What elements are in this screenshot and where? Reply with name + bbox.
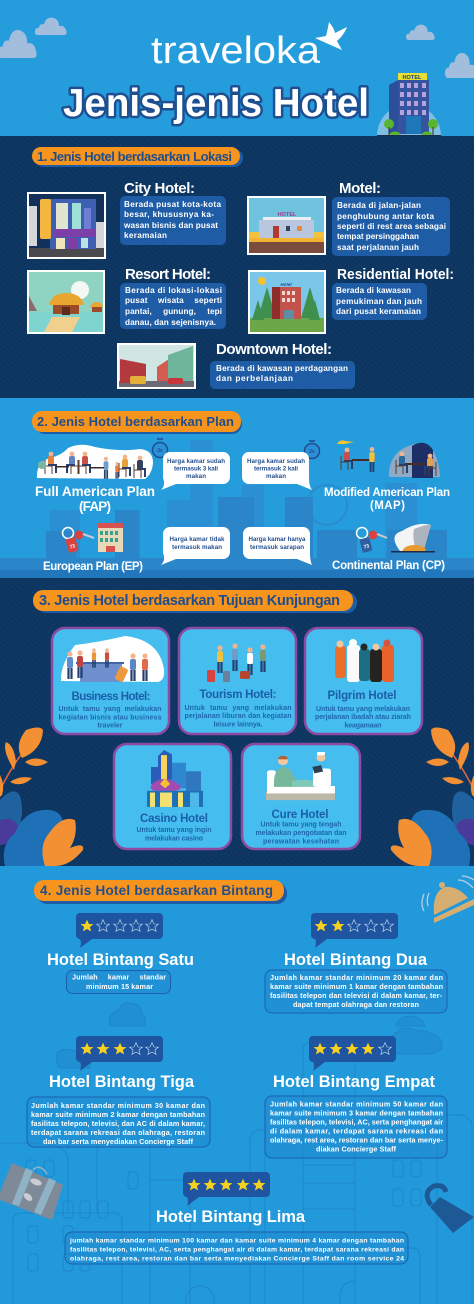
rating: one star [76,913,163,948]
card: business hotel [52,628,169,734]
card: cure hotel: Cure Hotel [272,809,328,821]
card: cure hotel: Untuk tamu yang tengah [260,822,342,828]
callout: 3 kali makan: Harga kamar sudah [167,458,225,465]
heading: section 4: 4. Jenis Hotel berdasarkan Bintang [40,883,273,898]
icon: clock 3x [152,438,168,458]
heading: section 3 [33,590,357,613]
callout: 3 kali makan [161,452,230,490]
icon: hotel building: HOTEL [403,75,422,81]
label: resort hotel: Resort Hotel: [125,266,211,283]
image: motel: HOTEL [278,212,297,218]
text: motel: Berada di jalan-jalan [337,201,421,210]
card: business hotel: Business Hotel: [72,691,150,703]
text: hotel bintang dua: kamar suite minimum 1 kamar dengan tambahan [270,982,443,991]
heading: section 1: 1. Jenis Hotel berdasarkan Lokasi [37,149,232,164]
text: hotel bintang tiga: Jumlah kamar standar minimum 30 kamar dan [31,1101,205,1110]
callout: 2 kali makan [242,452,312,490]
heading: section 2 [32,411,242,434]
text: hotel bintang satu: Jumlah kamar standar [72,972,166,982]
rating: three stars [76,1036,163,1071]
label: downtown hotel: Downtown Hotel: [216,341,332,358]
text: hotel bintang tiga: terdapat sarana rekreasi dan olahraga, restoran [31,1128,205,1137]
panel: plan [0,398,474,578]
label: modified american plan: Modified American Plan [324,487,450,499]
image: modified american plan [337,440,440,478]
text: hotel bintang empat [265,1096,447,1158]
image: european plan: 73 [69,543,76,551]
label: european plan: European Plan (EP) [43,561,143,573]
card: pilgrim hotel: Pilgrim Hotel [328,690,396,702]
heading: section 2: 2. Jenis Hotel berdasarkan Plan [37,414,234,429]
text: resort hotel: Berada di lokasi-lokasi [125,286,222,295]
icon: clock 2x [304,440,320,458]
icon: bell [422,876,474,923]
callout: 3 kali makan: termasuk 3 kali [174,466,218,472]
background clouds [56,1003,442,1068]
title: Jenis-jenis Hotel [63,82,369,125]
text: hotel bintang lima [65,1232,408,1264]
text: downtown hotel: dan perbelanjaan [216,374,293,383]
image: tourists [207,643,266,682]
icon: clock 2x: 2x [309,449,315,455]
logo: traveloka: traveloka [151,30,321,72]
text: hotel bintang tiga: dan bar serta menyediakan Concierge Staff [43,1137,194,1146]
card: pilgrim hotel: keagamaan [344,722,382,730]
text: hotel bintang dua: fasilitas telepon dan televisi di dalam kamar, ter- [270,991,443,1000]
text: motel: seperti di rest area sebagai [337,222,446,231]
callout: hanya sarapan [243,527,312,565]
text: motel: penghubung antar kota [337,212,434,221]
icon: hotel building [377,73,441,136]
text: hotel bintang dua: Jumlah kamar standar minimum 20 kamar dan [270,973,443,982]
logo: traveloka [151,22,347,72]
card: pilgrim hotel: Untuk tamu yang melakukan [316,706,410,713]
callout: tidak termasuk makan: Harga kamar tidak [170,536,225,543]
text: resort hotel: pusat wisata seperti [125,296,222,305]
text: hotel bintang dua: dapat tempat olahraga dan restoran [293,1000,419,1009]
image: residential: Hotel [280,282,292,287]
card: pilgrim hotel: perjalanan ibadah atau ziarah [315,714,411,721]
heading: section 4 [34,880,287,904]
text: residential hotel: pemukiman dan jauh [336,297,422,306]
text: hotel bintang lima: fasilitas telepon, televisi, AC, serta penghangat air di dalam kamar, terdapat sarana rekreasi dan [70,1246,404,1254]
image: continental plan [356,524,435,553]
text: resort hotel: danau, dan sejenisnya. [125,318,216,327]
skyline background [50,440,417,570]
card: casino hotel: melakukan casino [145,836,203,842]
card: casino hotel: Untuk tamu yang ingin [136,827,212,834]
card: cure hotel: perawatan kesehatan [263,838,339,846]
image: pilgrims [335,639,394,682]
card: pilgrim hotel [305,628,422,734]
card: cure hotel [242,744,360,849]
panel: lokasi [0,136,474,398]
label: hotel bintang empat: Hotel Bintang Empat [273,1073,436,1091]
background outlines: city [0,1040,472,1304]
text: hotel bintang empat: di dalam kamar, terdapat sarana rekreasi dan [270,1126,443,1136]
card: tourism hotel: perjalanan liburan dan kegiatan [184,713,292,720]
decoration: right leaves [391,728,474,866]
label: residential hotel: Residential Hotel: [337,266,454,283]
image: motel [247,196,326,255]
text: hotel bintang dua [265,970,447,1013]
card: tourism hotel: Tourism Hotel: [200,689,276,701]
card: tourism hotel: Untuk tamu yang melakukan [184,705,292,712]
heading: section 1 [32,147,243,167]
image: casino [147,750,203,807]
card: casino hotel [114,744,231,849]
text: motel: tempat persinggahan [337,232,419,241]
card: business hotel: Untuk tamu yang melakukan [58,706,162,713]
text: hotel bintang empat: kamar suite minimum 3 kamar dengan tambahan [270,1108,443,1118]
card: tourism hotel: leisure lainnya. [214,722,263,728]
text: motel [332,197,450,256]
card: cure hotel: melakukan pengobatan dan [256,830,346,837]
callout: hanya sarapan: termasuk sarapan [250,544,304,551]
image: reception [61,636,164,682]
icon: bird [315,22,347,50]
text: motel: saat perjalanan jauh [337,243,419,252]
callout: tidak termasuk makan [161,527,230,565]
decoration: left leaves [0,728,83,866]
clouds [0,18,474,78]
image: resort [27,270,105,334]
text: downtown hotel [210,361,355,389]
callout: 2 kali makan: termasuk 2 kali [254,466,298,472]
callout: 2 kali makan: Harga kamar sudah [247,458,305,465]
label: full american plan: Full American Plan [35,484,155,499]
text: downtown hotel: Berada di kawasan perdagangan [216,364,348,373]
label: city hotel: City Hotel: [124,180,195,197]
image: patient and nurse [266,752,335,800]
text: hotel bintang satu: minimum 15 kamar [86,982,153,991]
text: residential hotel: dari pusat keramaian [336,307,421,316]
heading: section 3: 3. Jenis Hotel berdasarkan Tujuan Kunjungan [39,593,340,609]
text: hotel bintang empat: fasilitas telepon, televisi, AC, serta penghangat air [270,1118,443,1126]
label: hotel bintang satu: Hotel Bintang Satu [47,951,194,969]
icon: door hanger [427,1186,474,1233]
rating: five stars [183,1172,270,1206]
card: business hotel: kegiatan bisnis atau business [58,714,162,722]
image: residential [248,270,326,334]
label: continental plan: Continental Plan (CP) [332,560,445,572]
text: hotel bintang lima: olahraga, rest area, restoran dan bar serta menyediakan Concierge Staff dan room service 24 [70,1256,404,1262]
panel: tujuan kunjungan [0,578,474,866]
text: hotel bintang empat: Jumlah kamar standar minimum 50 kamar dan [270,1100,443,1108]
image: european plan [62,523,123,553]
text: city hotel: keramaian [124,231,167,240]
text: city hotel [120,196,226,245]
text: residential hotel [332,283,427,320]
text: city hotel: wasan bisnis dan pusat [123,221,218,230]
image: continental plan: 73 [363,543,370,551]
card: tourism hotel [179,628,296,734]
label: hotel bintang tiga: Hotel Bintang Tiga [49,1073,195,1091]
text: hotel bintang tiga [27,1097,210,1147]
text: resort hotel [120,283,226,329]
text: residential hotel: Berada di kawasan [336,286,411,295]
label: motel: Motel: [339,180,381,197]
icon: suitcase [0,1163,63,1220]
callout: hanya sarapan: Harga kamar hanya [248,536,306,543]
rating: two stars [311,913,398,948]
callout: tidak termasuk makan: termasuk makan [172,544,222,551]
image: city hotel [27,192,106,259]
text: hotel bintang satu [66,970,170,994]
text: hotel bintang tiga: kamar suite minimum 2 kamar dengan tambahan [31,1110,205,1119]
card: business hotel: traveler [98,722,123,730]
header sky background [0,0,474,137]
text: hotel bintang empat: diakan Concierge Staff [316,1144,397,1154]
text: city hotel: besar, khususnya ka- [124,210,214,219]
callout: 3 kali makan: makan [186,473,206,480]
label: hotel bintang lima: Hotel Bintang Lima [156,1208,306,1226]
image: full american plan [37,445,153,479]
callout: 2 kali makan: makan [266,473,286,480]
text: resort hotel: pantai, gunung, tepi [125,307,222,316]
text: hotel bintang lima: jumlah kamar standar minimum 100 kamar dan kamar suite minimum 4 kamar dengan tambahan [69,1238,404,1244]
image: downtown [117,343,196,389]
text: hotel bintang tiga: fasilitas telepon, televisi, dan AC di dalam kamar, [31,1119,205,1128]
text: city hotel: Berada pusat kota-kota [124,200,221,209]
label: modified american plan: (MAP) [370,500,405,512]
text: hotel bintang empat: olahraga, rest area, restoran dan bar serta menye- [270,1136,444,1144]
panel: bintang [0,866,474,1304]
label: hotel bintang dua: Hotel Bintang Dua [284,951,428,969]
rating: four stars [309,1036,396,1071]
label: full american plan: (FAP) [79,499,111,514]
card: casino hotel: Casino Hotel [140,813,208,825]
icon: clock 3x: 3x [157,448,163,454]
